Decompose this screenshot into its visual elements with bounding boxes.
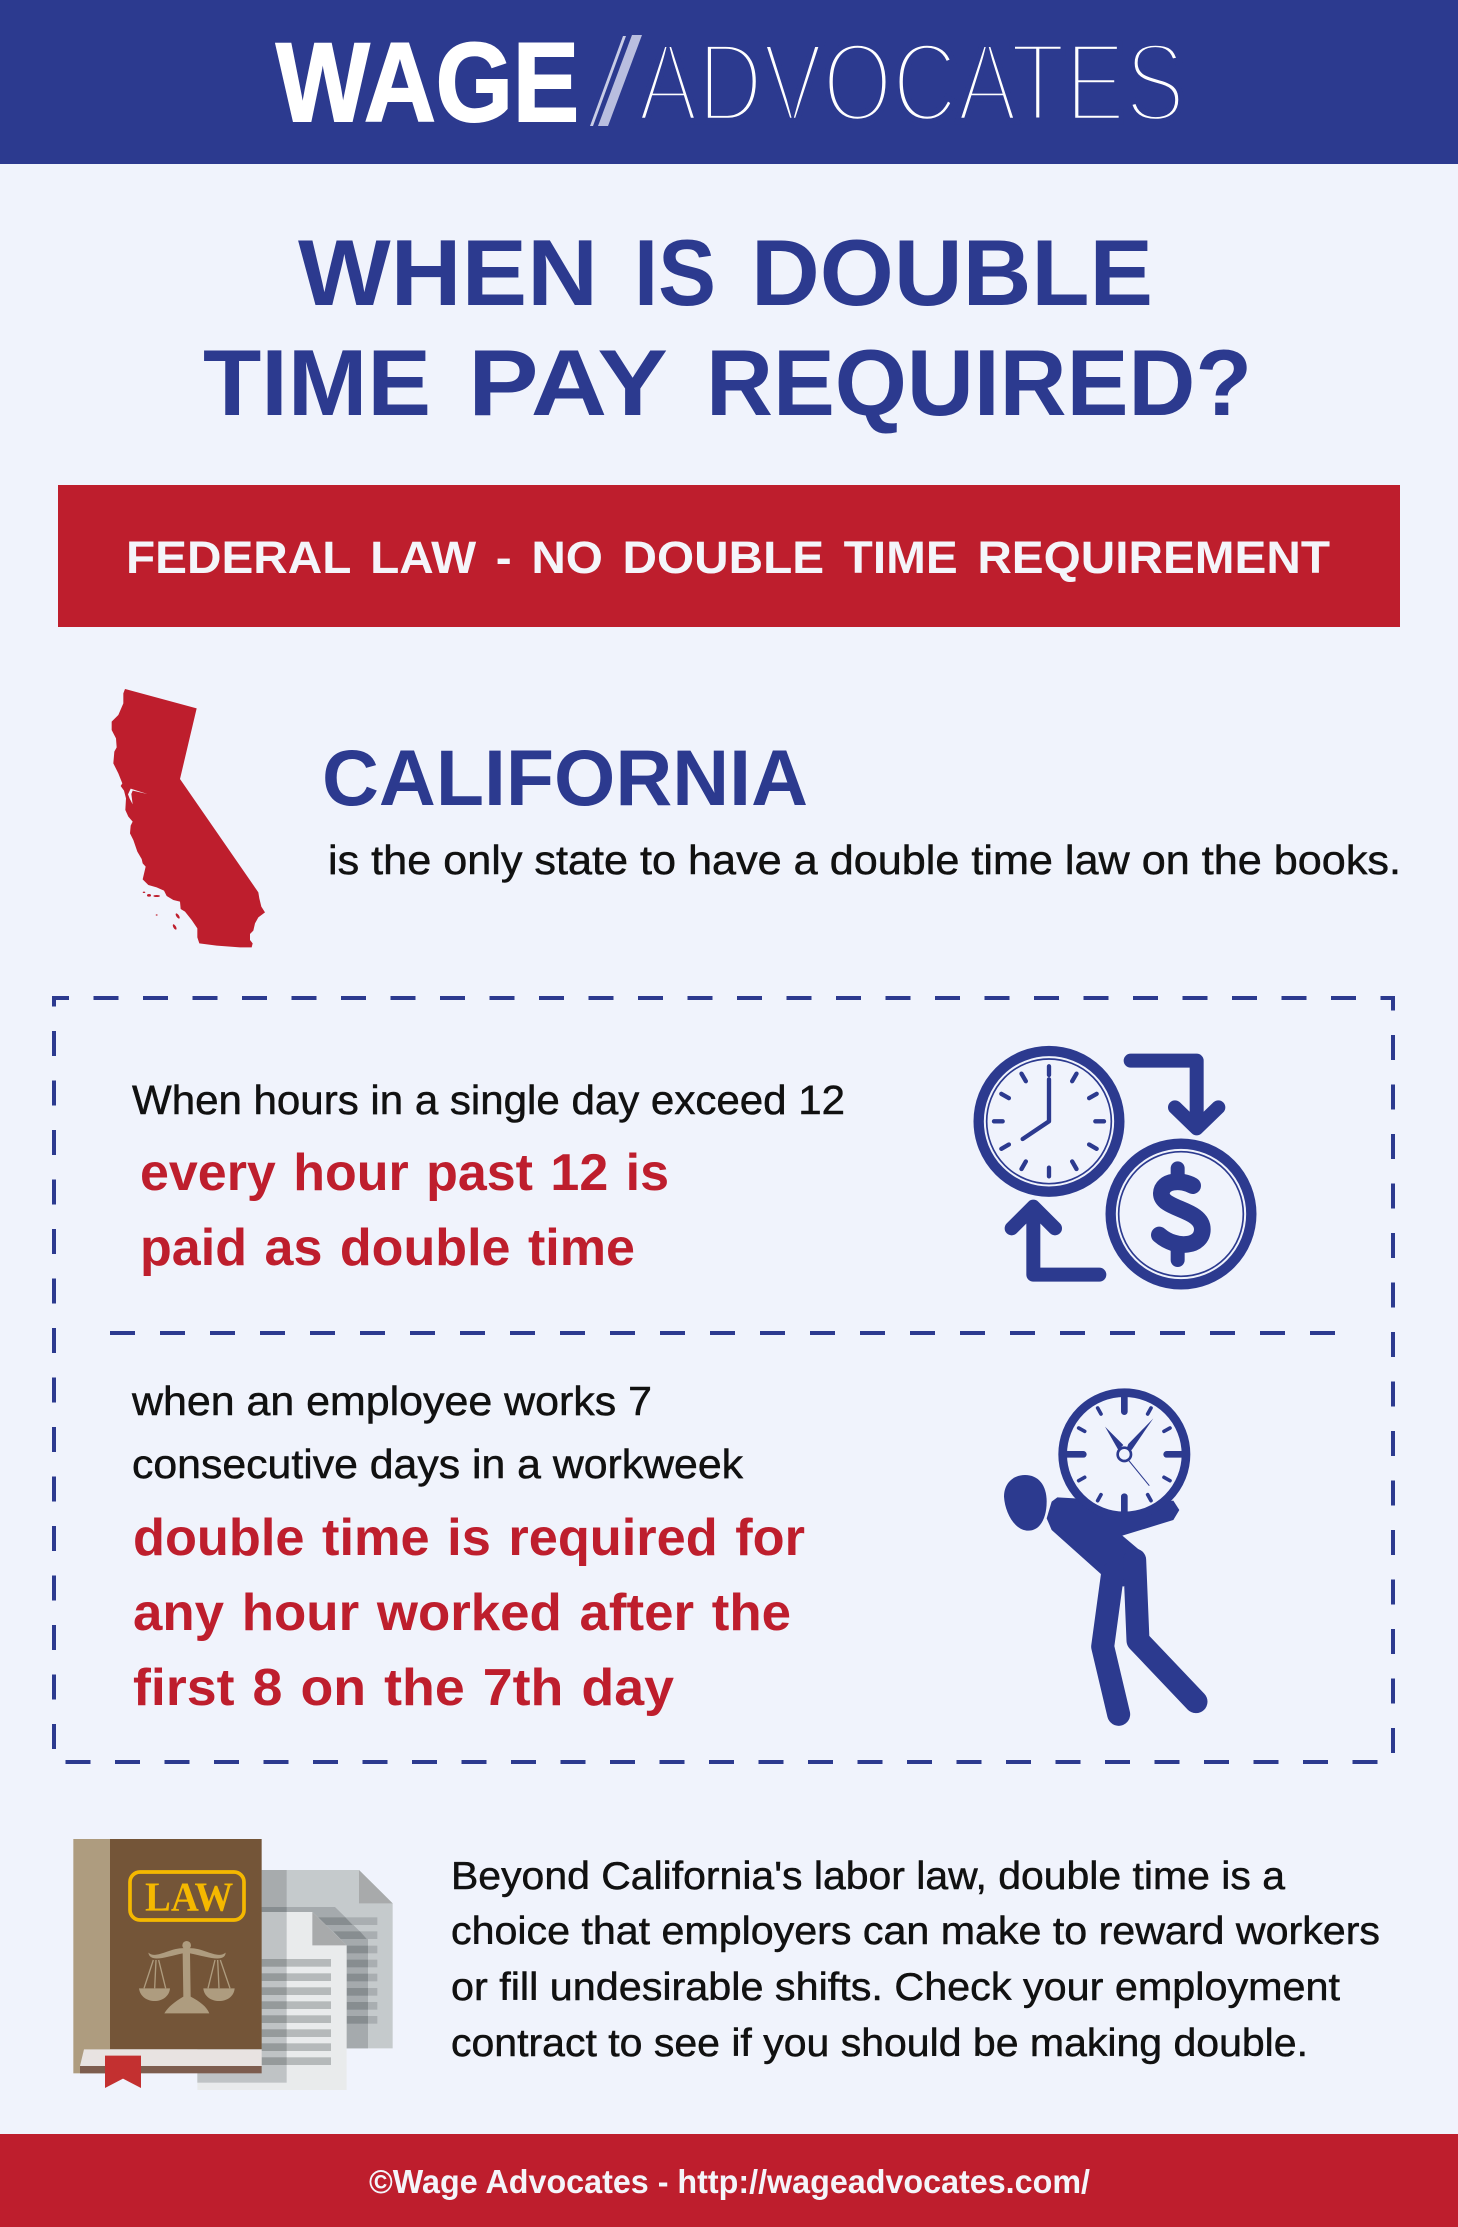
text: closing paragraph: or fill undesirable shifts. Check your employment	[451, 1966, 1340, 2009]
text: closing paragraph	[451, 1855, 1380, 2065]
panel: dashed conditions box	[54, 998, 1393, 1762]
header band with logo	[0, 0, 1458, 164]
icon: clock and dollar exchange	[979, 1051, 1251, 1284]
title: IS	[634, 220, 716, 325]
banner: federal law	[58, 485, 1400, 627]
text: second condition	[131, 1378, 805, 1717]
icon: person carrying clock	[1004, 1393, 1196, 1714]
text: first condition: every hour past 12 is	[140, 1144, 669, 1202]
text: second condition: consecutive days in a workweek	[132, 1441, 744, 1487]
text: closing paragraph: Beyond California's labor law, double time is a	[451, 1855, 1285, 1898]
text: second condition: when an employee works 7	[131, 1378, 652, 1424]
title: TIME	[203, 330, 431, 435]
text: first condition	[132, 1077, 845, 1277]
footer band: ©Wage Advocates - http://wageadvocates.com/	[369, 2163, 1090, 2200]
banner: federal law: FEDERAL LAW - NO DOUBLE TIME REQUIREMENT	[126, 532, 1330, 583]
icon: law book and documents: LAW	[145, 1875, 233, 1921]
title: DOUBLE	[751, 220, 1153, 325]
heading: California: CALIFORNIA	[322, 733, 808, 822]
text: only state: is the only state to have a double time law on the books.	[328, 837, 1401, 883]
footer band	[0, 2134, 1458, 2227]
text: closing paragraph: contract to see if you should be making double.	[451, 2022, 1308, 2065]
text: first condition: paid as double time	[140, 1219, 635, 1277]
icon: California map	[112, 689, 265, 947]
header band with logo: ADVOCATES	[638, 20, 1185, 145]
header band with logo: WAGE	[276, 20, 579, 145]
title	[203, 220, 1252, 435]
title: WHEN	[298, 220, 598, 325]
text: second condition: double time is required for	[133, 1509, 805, 1567]
icon: law book and documents	[73, 1839, 393, 2090]
title: REQUIRED?	[706, 330, 1252, 435]
text: second condition: first 8 on the 7th day	[133, 1659, 674, 1717]
text: closing paragraph: choice that employers can make to reward workers	[451, 1910, 1380, 1953]
text: second condition: any hour worked after the	[133, 1584, 791, 1642]
title: PAY	[468, 330, 668, 435]
text: first condition: When hours in a single day exceed 12	[132, 1077, 845, 1123]
